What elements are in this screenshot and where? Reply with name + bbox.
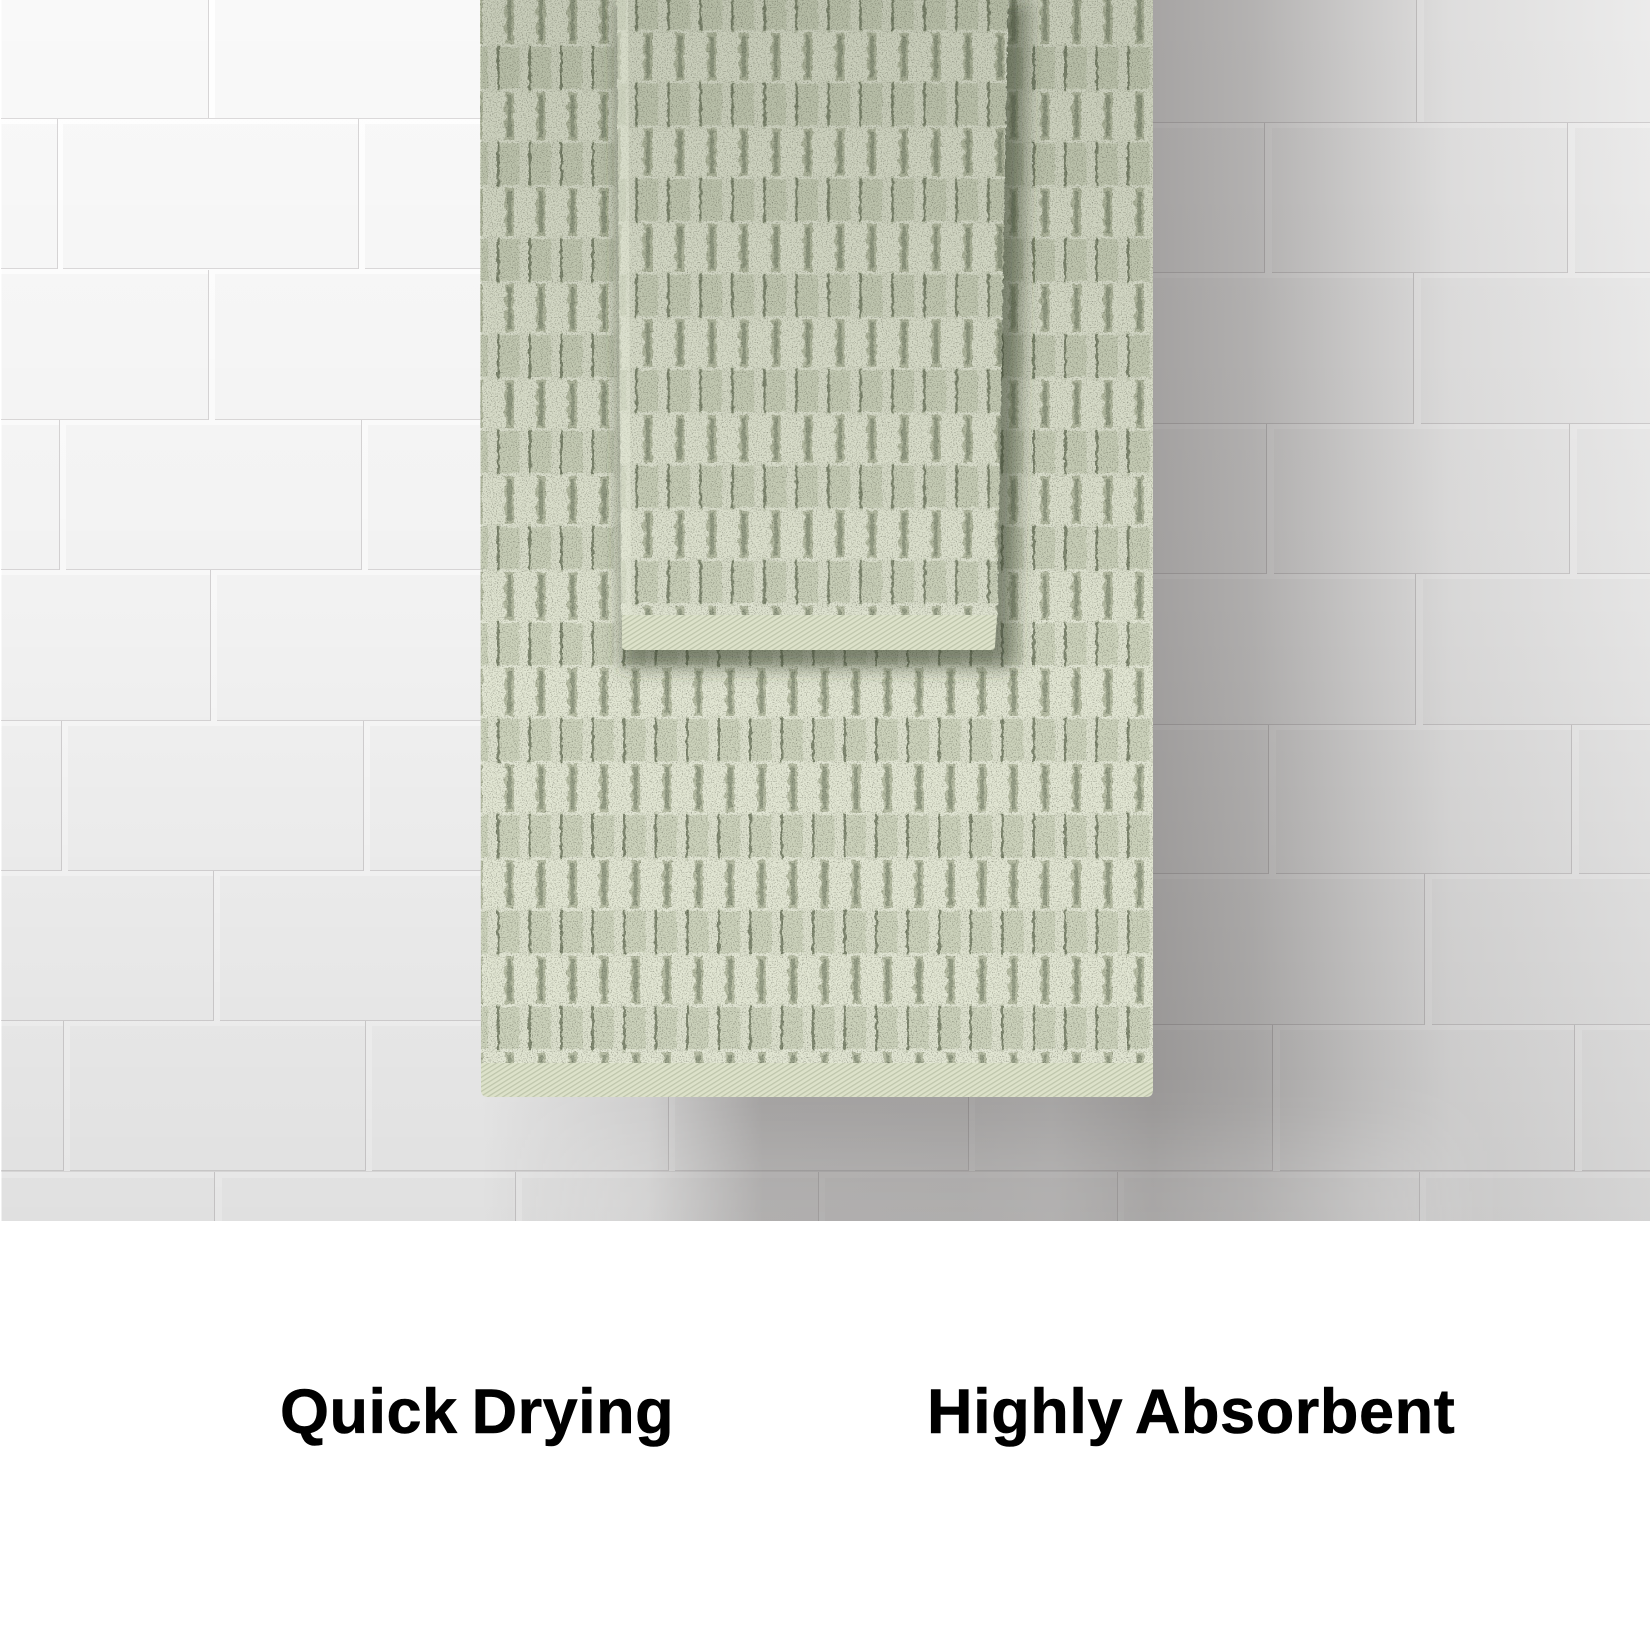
towel selvedge: small towel left edge highlight bbox=[617, 0, 631, 615]
wall: shadow falloff near the bottom of the photo bbox=[560, 1140, 1440, 1310]
wall: cast shadow below the towel bbox=[480, 1090, 1153, 1221]
wall: base tile surface bbox=[2, 0, 1650, 1221]
towel hem: small towel woven border bbox=[622, 615, 997, 650]
shadow: small towel cast on large towel bbox=[617, 0, 1028, 668]
towel hem: large towel woven border bbox=[481, 1063, 1153, 1097]
towel shading: darker upper folds bbox=[481, 0, 1153, 494]
towel: large bath towel bbox=[470, 0, 1165, 1097]
heading: Highly Absorbent: Highly Absorbent bbox=[927, 1377, 1455, 1447]
towel: small hand towel bbox=[617, 0, 1008, 650]
wall: cast shadow to the right of the towel bbox=[1153, 0, 1650, 1221]
wall: vertical grout lines bbox=[57, 0, 1582, 1221]
heading: Quick Drying: Quick Drying bbox=[280, 1377, 674, 1447]
wall: horizontal grout lines bbox=[1, 118, 1650, 1178]
towel shading: small towel darker upper area bbox=[617, 0, 1008, 620]
photo: towels hanging on a white tiled wall bbox=[1, 0, 1650, 1221]
towel body: small towel terry weave bbox=[617, 0, 1008, 625]
wall: ambient darkening toward the bottom bbox=[2, 0, 1650, 1221]
towel body: large towel terry weave bbox=[470, 0, 1165, 1075]
